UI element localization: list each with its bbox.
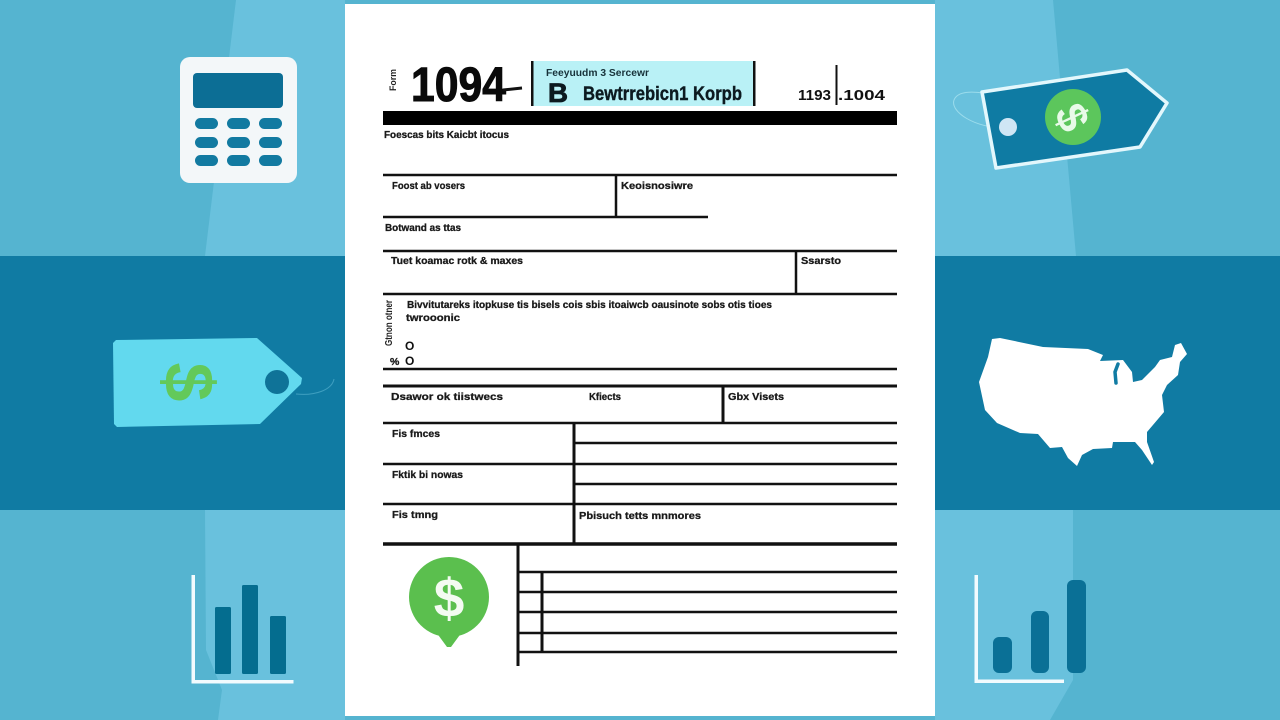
form header: 1094 [411,59,506,112]
form field labels: Dsawor ok tiistwecs [391,391,503,403]
form field labels: Keoisnosiwre [621,180,693,192]
form field labels: O [405,354,414,368]
form field labels: % [390,356,400,368]
form field labels: Ssarsto [801,255,841,267]
form header [388,59,886,112]
form field labels: Bivvitutareks itopkuse tis bisels cois sbis itoaiwcb oausinote sobs otis tioes [407,299,772,311]
form header: Form [388,69,398,91]
form field labels: Foescas bits Kaicbt itocus [384,129,509,141]
form field labels: Kfiects [589,391,621,403]
black header bar [383,111,897,125]
form field labels: Fis fmces [392,428,440,440]
form field labels: Tuet koamac rotk & maxes [391,255,523,267]
icon: green dollar pin: $ [434,567,464,629]
form header: .1004 [838,87,886,104]
icon: map of the United States [979,338,1187,466]
form field labels: Botwand as ttas [385,222,461,234]
form header: Bewtrrebicn1 Korpb [583,84,742,105]
panel: tax form page [345,4,935,716]
icon: left price tag [113,338,334,427]
form field labels: Gtnon otner [384,300,395,346]
form field labels: Pbisuch tetts mnmores [579,510,701,522]
form field labels [384,129,841,522]
icon: right price tag: $ [1044,96,1099,139]
bar chart: right [974,575,1086,683]
form header: B [548,78,568,108]
icon: right price tag [954,70,1167,168]
form header: Feeyuudm 3 Sercewr [546,67,649,79]
icon: green dollar pin [409,557,489,647]
icon: calculator [180,57,297,183]
form header: 1193 [798,87,831,104]
form field labels: twrooonic [406,312,460,324]
bar chart: left [192,575,294,684]
form field labels: O [405,339,414,353]
icon: left price tag: $ [150,363,228,401]
form field labels: Gbx Visets [728,391,784,403]
form grid lines [383,175,897,666]
form field labels: Fis tmng [392,509,438,521]
form field labels: Fktik bi nowas [392,469,463,481]
form field labels: Foost ab vosers [392,180,465,192]
